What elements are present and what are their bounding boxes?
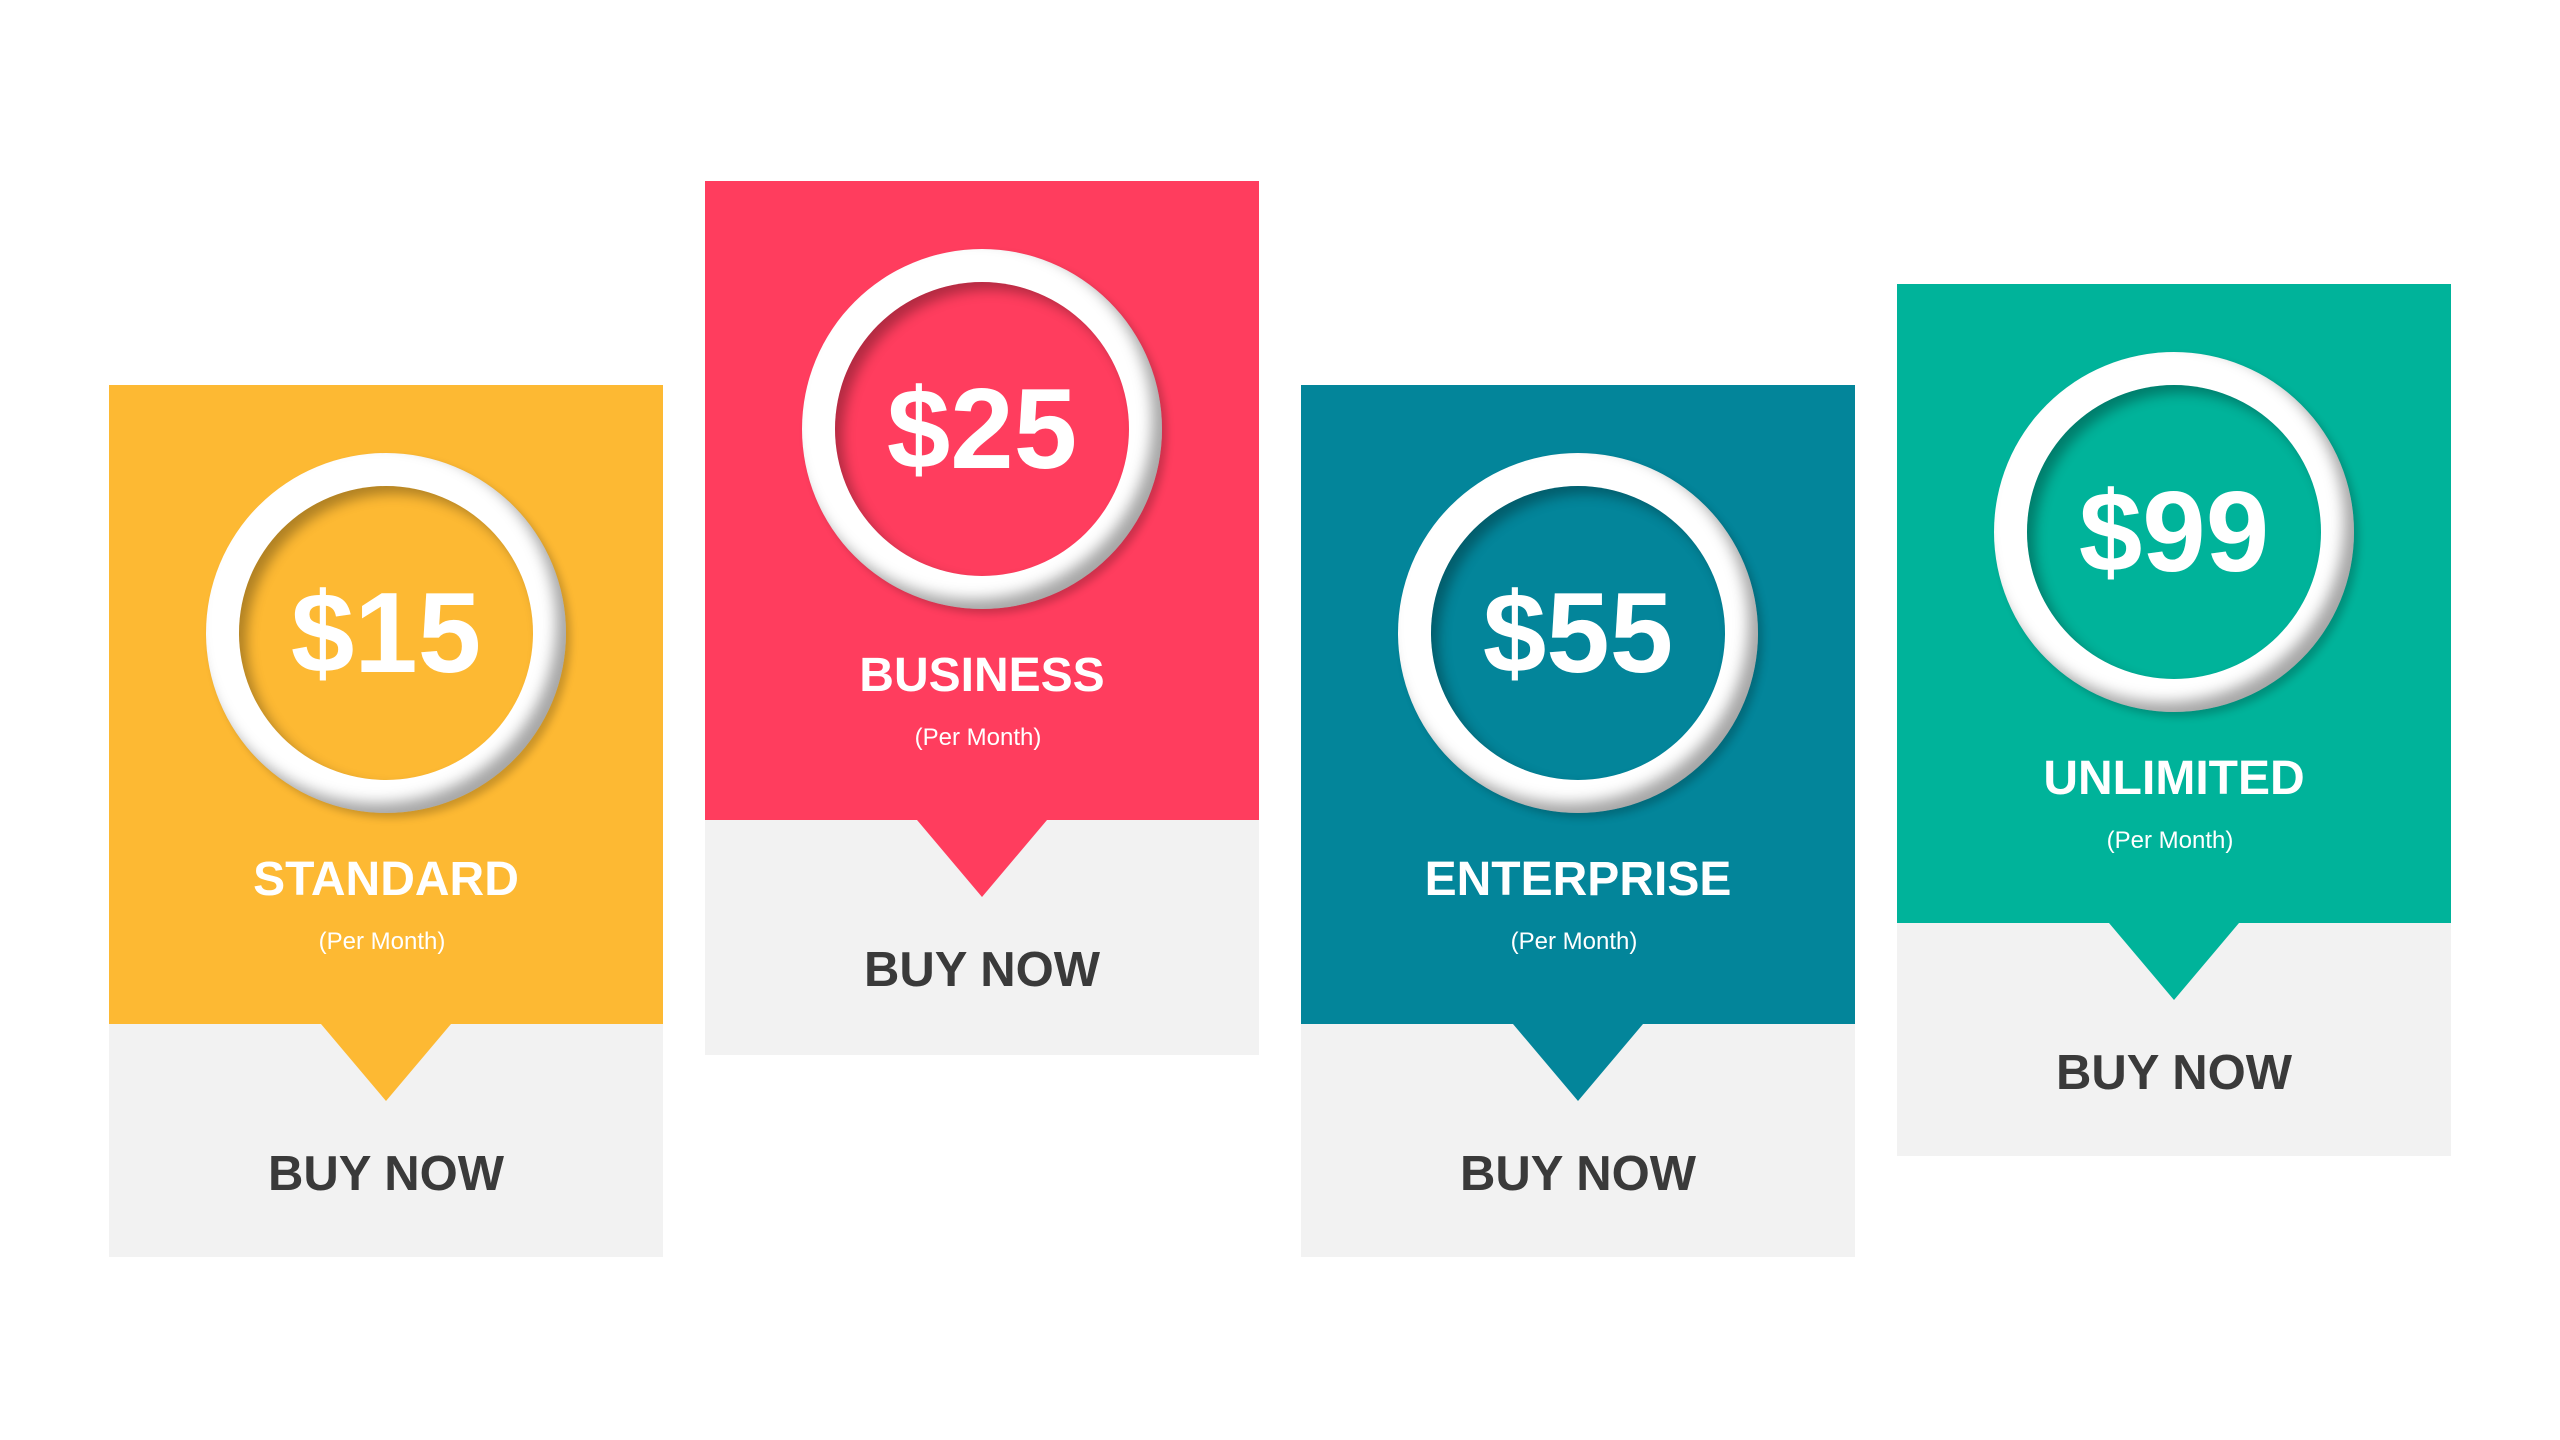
button: BUY NOW — [2056, 1046, 2292, 1100]
price ring: $15 — [291, 570, 481, 696]
price ring: $25 — [887, 366, 1077, 492]
card: unlimited — [1897, 284, 2451, 1156]
price ring — [802, 249, 1162, 609]
plan name: STANDARD — [253, 853, 519, 906]
pointer — [1513, 1024, 1643, 1101]
pointer — [917, 820, 1047, 897]
pointer — [2109, 923, 2239, 1000]
card: standard — [109, 385, 663, 1257]
period: (Per Month) — [319, 928, 445, 955]
card: enterprise — [1301, 385, 1855, 1257]
plan name: BUSINESS — [859, 649, 1105, 702]
price ring: $99 — [2079, 468, 2269, 596]
button: BUY NOW — [864, 943, 1100, 997]
button: BUY NOW — [268, 1147, 504, 1201]
button: BUY NOW — [1460, 1147, 1696, 1201]
period: (Per Month) — [1511, 928, 1637, 955]
period: (Per Month) — [915, 724, 1041, 751]
price ring — [1994, 352, 2354, 712]
plan name: ENTERPRISE — [1425, 853, 1731, 906]
price ring — [1398, 453, 1758, 813]
card: business — [705, 181, 1259, 1055]
pointer — [321, 1024, 451, 1101]
plan name: UNLIMITED — [2043, 752, 2305, 805]
price ring — [206, 453, 566, 813]
price ring: $55 — [1483, 570, 1673, 696]
period: (Per Month) — [2107, 827, 2233, 854]
